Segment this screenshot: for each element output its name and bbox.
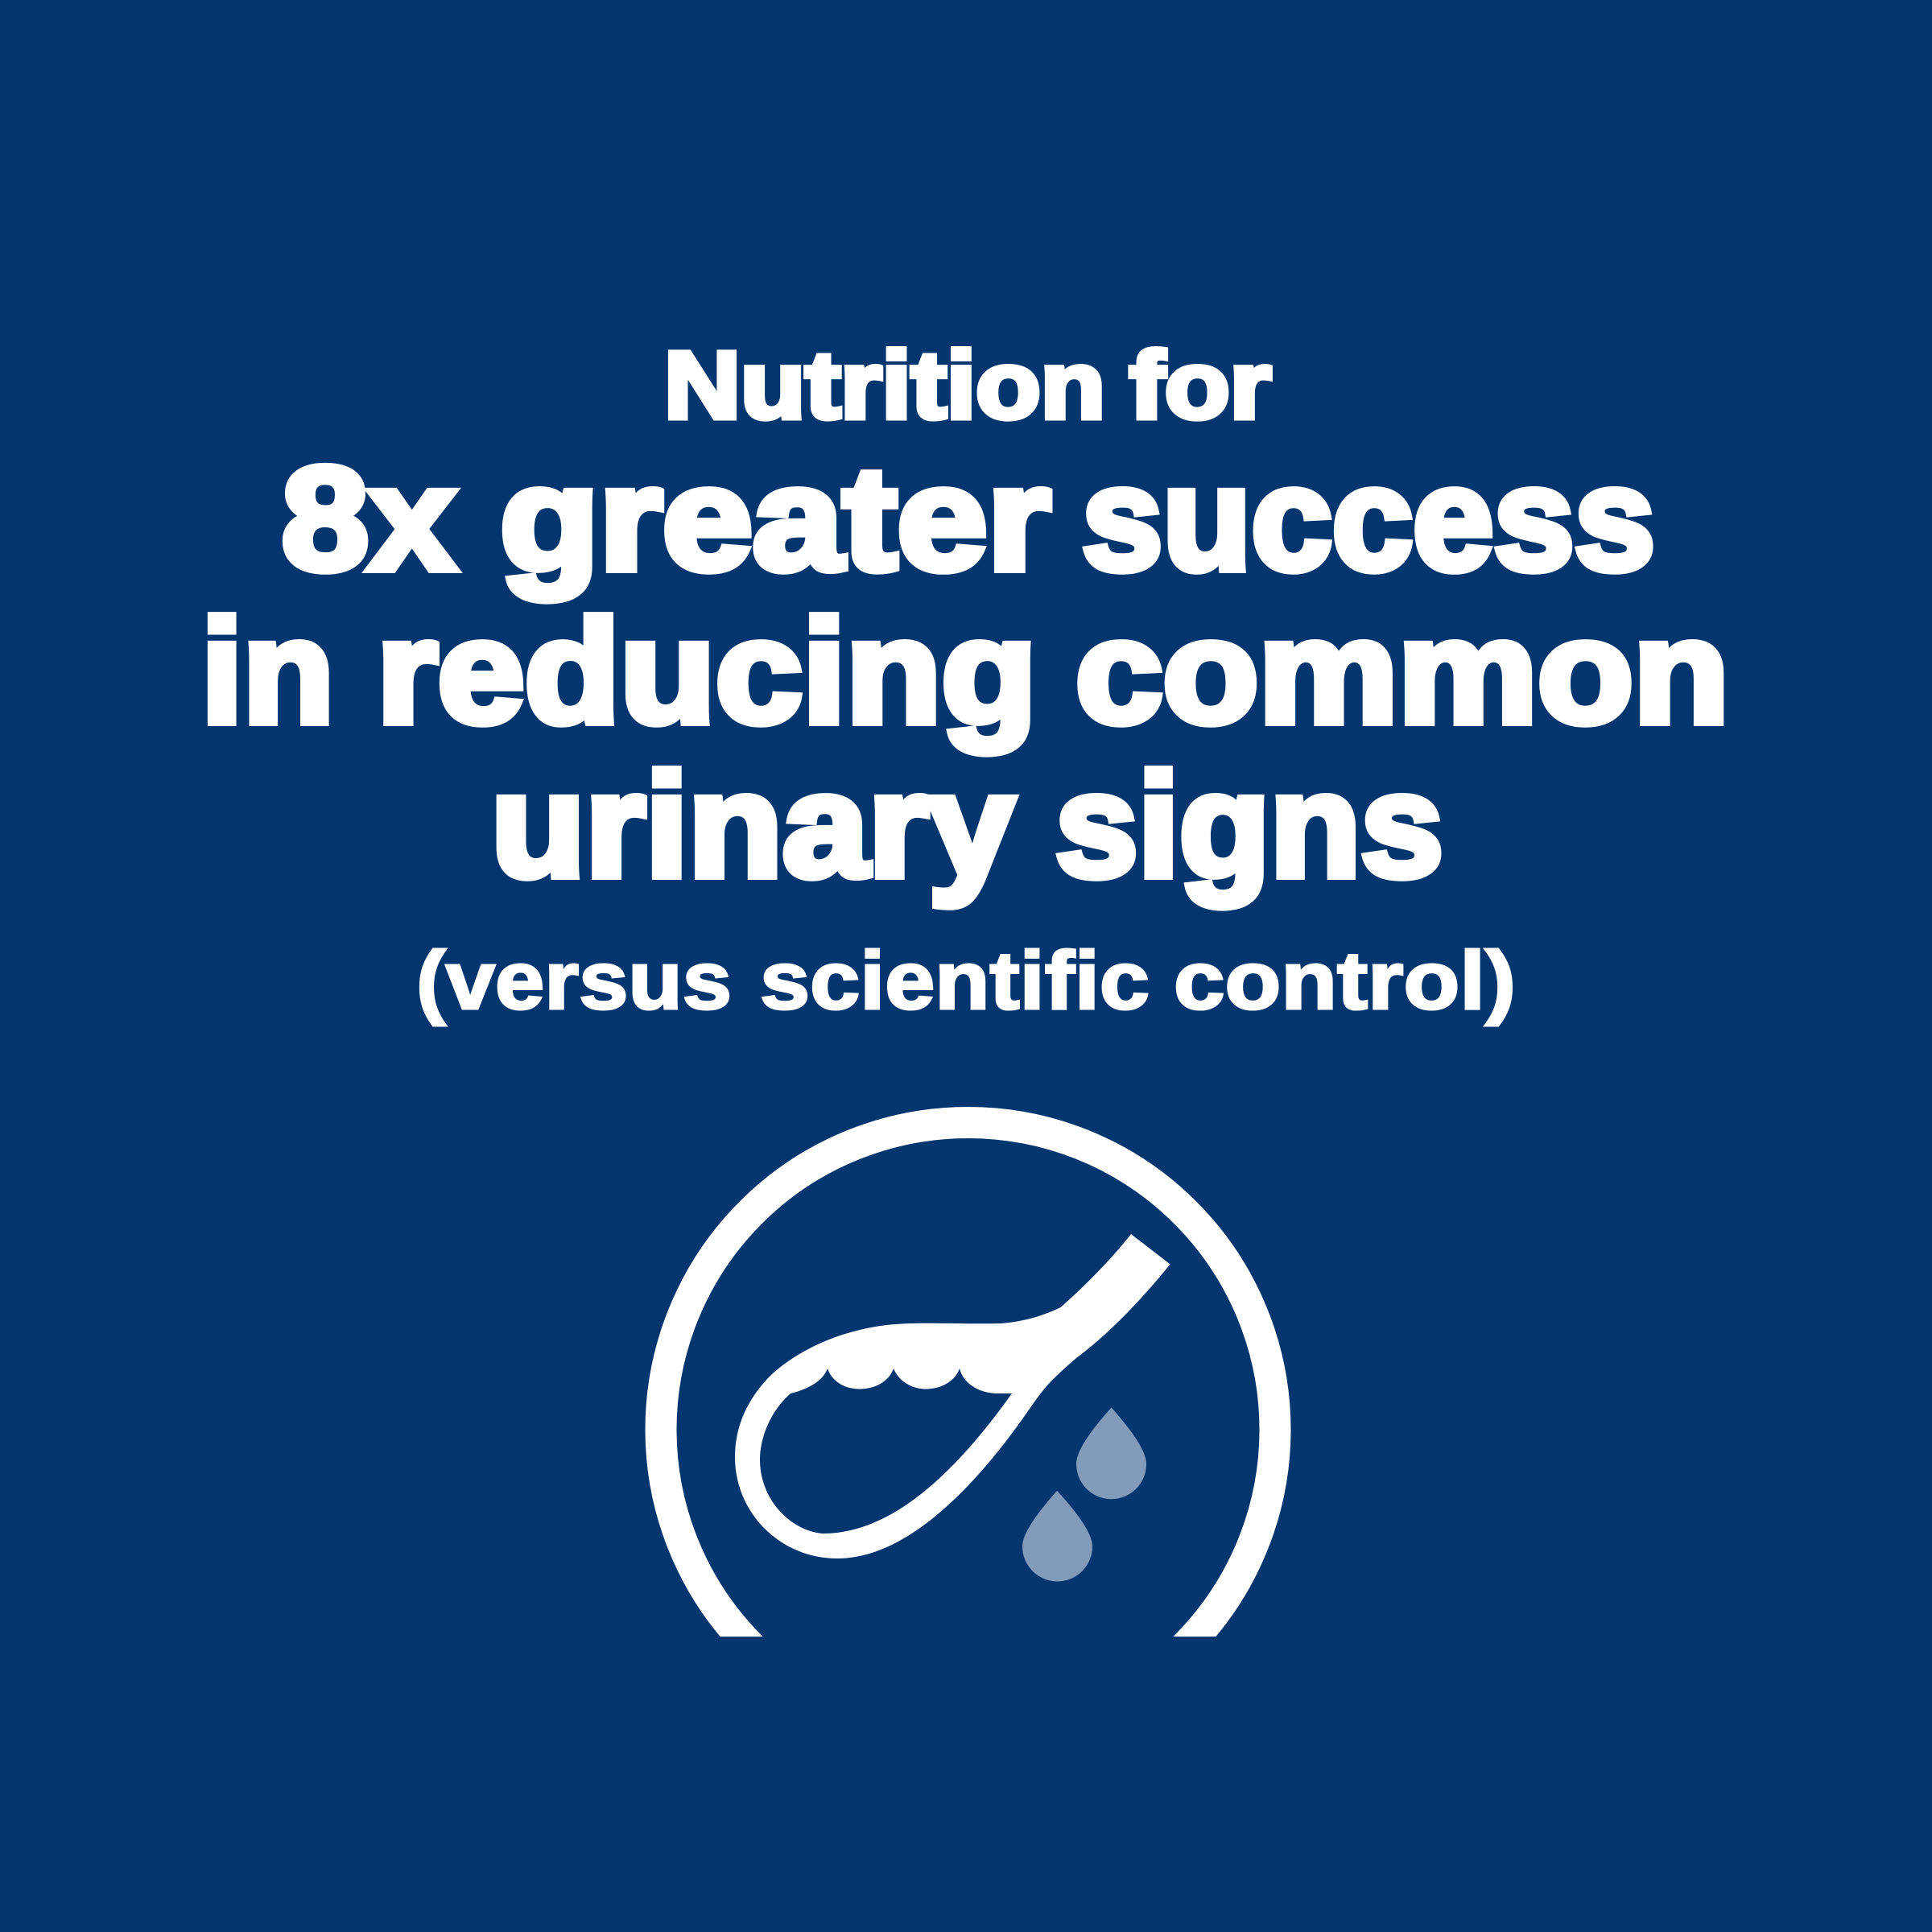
headline line 2: common bbox=[1075, 589, 1729, 753]
headline line 3 bbox=[491, 743, 1443, 907]
icon: open ring bbox=[661, 1122, 1275, 1737]
headline line 1: success bbox=[1082, 436, 1655, 601]
intro line: Nutrition bbox=[664, 332, 1105, 439]
headline line 1: 8x bbox=[282, 436, 456, 601]
headline line 1: greater bbox=[500, 436, 1051, 601]
heading text block bbox=[201, 332, 1729, 1026]
headline line 1 bbox=[282, 436, 1655, 601]
icon: lower water drop bbox=[1022, 1491, 1092, 1581]
subtitle bbox=[416, 935, 1516, 1026]
intro line: for bbox=[1129, 332, 1271, 439]
headline line 2: reducing bbox=[377, 589, 1037, 753]
headline line 2 bbox=[201, 589, 1729, 753]
infographic canvas bbox=[208, 346, 1724, 1637]
icon: upper water drop bbox=[1076, 1407, 1146, 1499]
subtitle: (versus bbox=[416, 935, 732, 1026]
headline line 3: signs bbox=[1055, 743, 1443, 907]
intro line bbox=[664, 332, 1271, 439]
headline line 3: urinary bbox=[491, 743, 1014, 907]
headline line 2: in bbox=[201, 589, 334, 753]
icon: bladder in open ring bbox=[661, 1122, 1275, 1737]
icon: bladder outline bbox=[735, 1234, 1170, 1558]
subtitle: scientific bbox=[760, 935, 1150, 1026]
subtitle: control) bbox=[1174, 935, 1516, 1026]
